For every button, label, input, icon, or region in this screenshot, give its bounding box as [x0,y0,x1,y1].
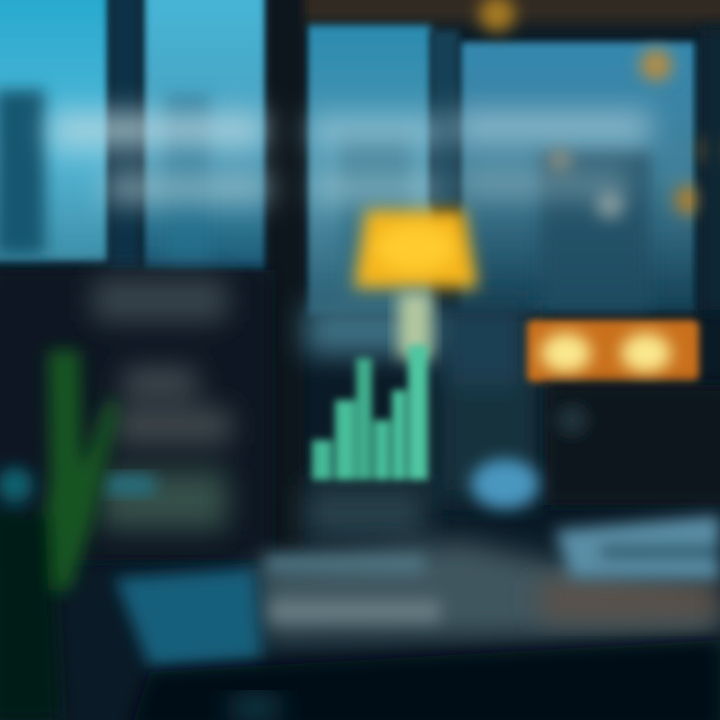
right blue tray [555,515,720,580]
top ceiling band [290,0,720,24]
icon: yellow lamp shade [354,210,478,288]
desk warm reflection [540,580,720,620]
lamp stem [398,292,432,358]
right dark monitor [545,385,720,505]
lower window haze [305,300,545,540]
desk surface blue [115,568,262,668]
window panes [0,0,696,315]
green bar chart [312,345,428,480]
green plant [0,350,118,720]
blue mug [471,459,539,509]
orange lamp [527,320,699,382]
light reflection bands [50,110,650,204]
shelves [92,278,232,530]
dark window frames [110,0,459,550]
bottom dark edge [130,640,720,720]
distant buildings [0,90,650,310]
teal item on shelf [105,475,155,495]
right edge dark [700,30,720,310]
dark left cabinet [0,270,270,560]
bottom glow [227,698,283,718]
desk surface grey [255,540,720,640]
desk light streaks [265,555,440,622]
bokeh lights [479,0,720,219]
